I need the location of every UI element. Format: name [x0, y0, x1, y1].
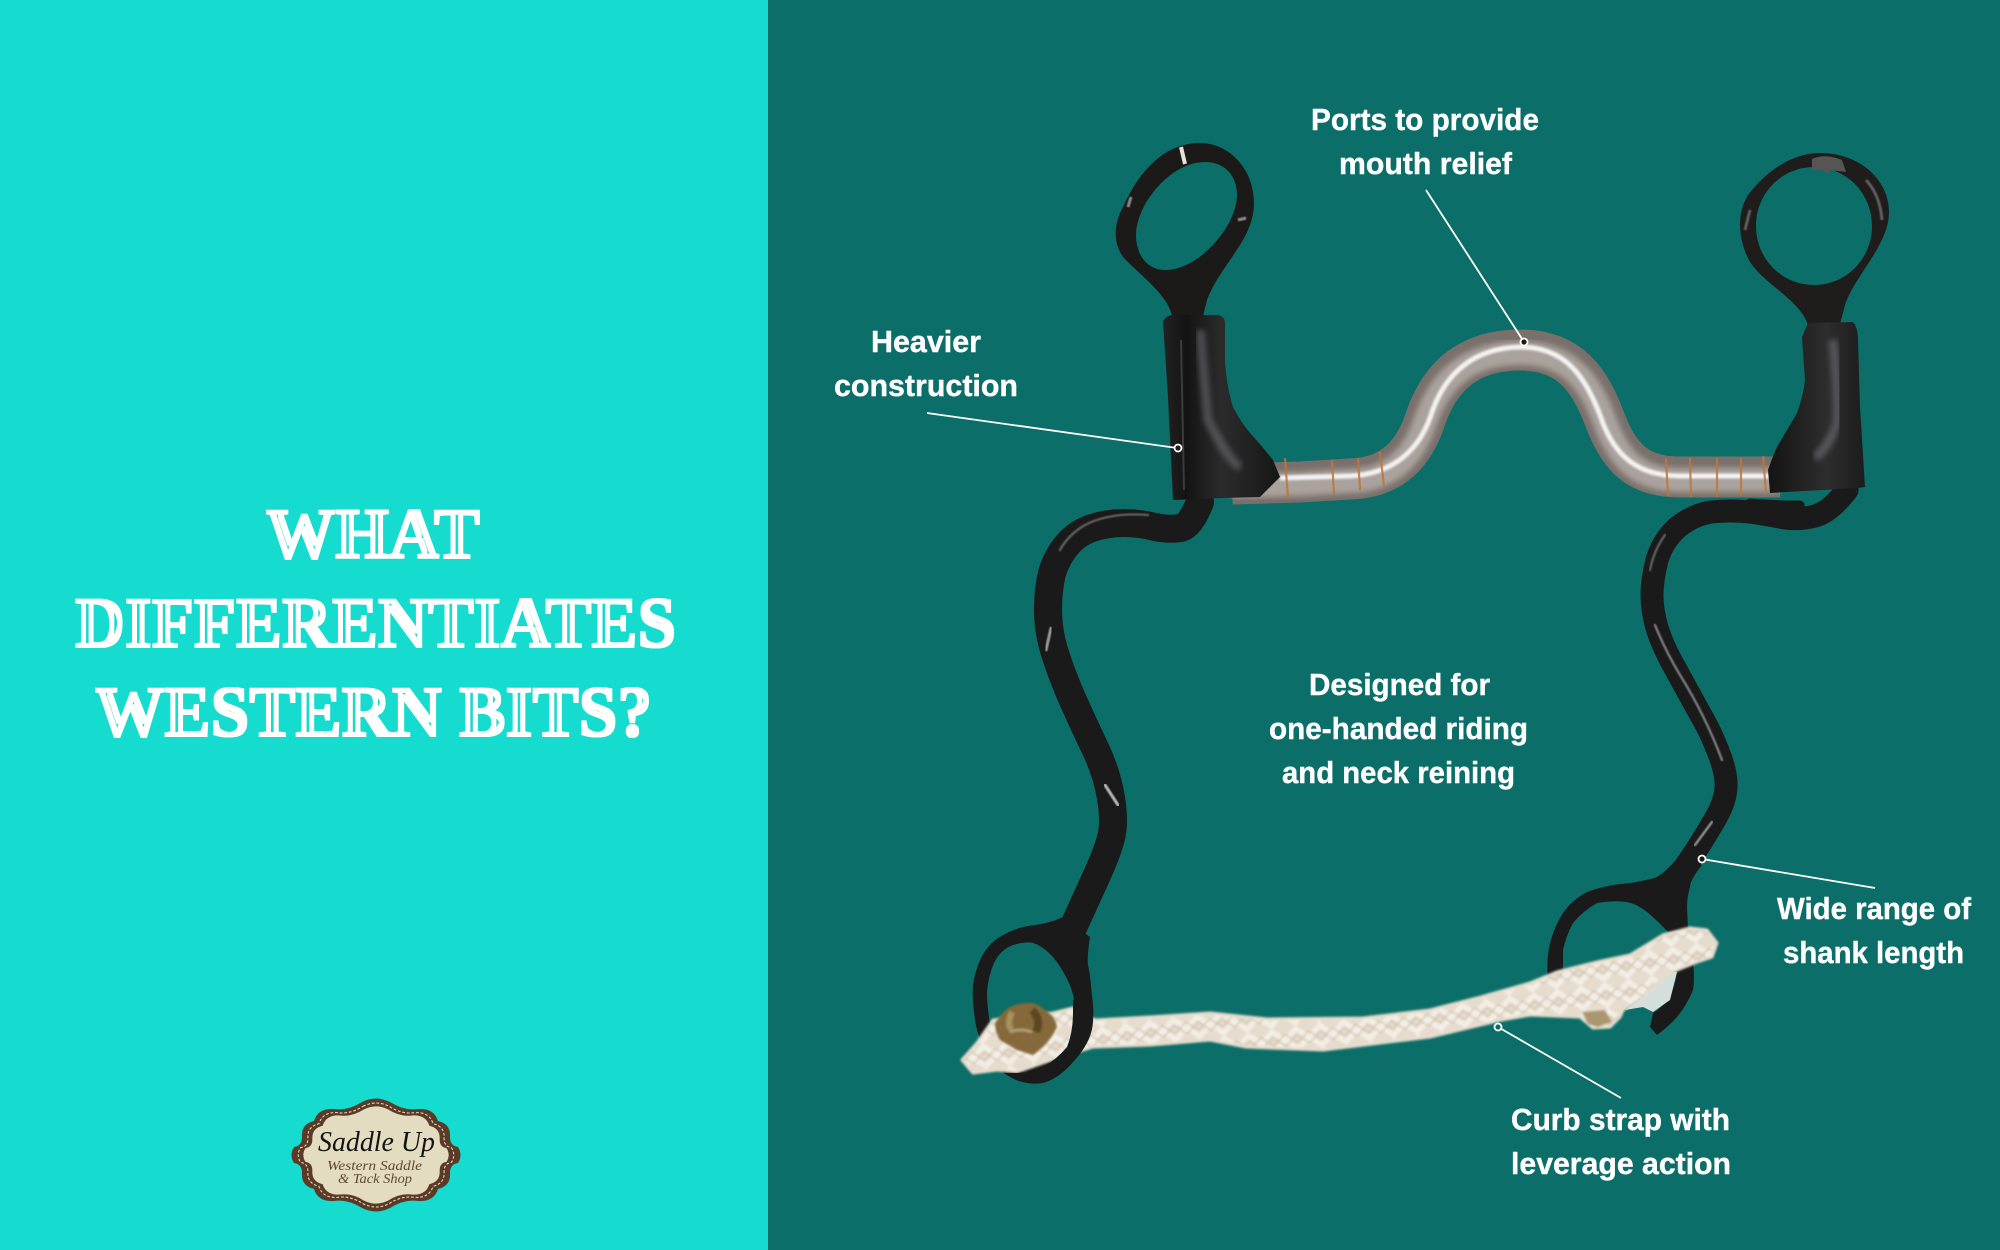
- title: [75, 494, 676, 752]
- left top ring: [1116, 143, 1254, 316]
- callout: heavier construction: Heavier: [871, 324, 981, 359]
- left lower ring: [973, 917, 1093, 1084]
- callout: shank length: [1698, 856, 1972, 970]
- rope curb strap: [962, 928, 1717, 1073]
- left cheek piece: [1163, 315, 1280, 500]
- callout: curb strap: leverage action: [1511, 1146, 1731, 1181]
- title: WESTERN BITS?: [95, 672, 652, 752]
- logo: Saddle Up badge: Saddle Up: [318, 1127, 435, 1158]
- lower knot tan: [1582, 1010, 1612, 1027]
- callout: designed for one-handed riding: and neck reining: [1282, 755, 1515, 790]
- brown knot: [995, 1003, 1057, 1055]
- callout: designed for one-handed riding: Designed for: [1309, 667, 1490, 702]
- logo: Saddle Up badge: Western Saddle: [327, 1159, 422, 1174]
- callout: designed for one-handed riding: one-handed riding: [1269, 711, 1528, 746]
- title: WHAT: [266, 494, 480, 574]
- callout: ports: mouth relief: [1339, 146, 1513, 181]
- callout: ports: [1311, 102, 1539, 346]
- right shank: [1650, 490, 1847, 870]
- mouthpiece with port: [1232, 347, 1780, 498]
- panel: right dark teal background: [768, 0, 2000, 1250]
- callout: heavier construction: [834, 324, 1182, 452]
- callout: curb strap: [1494, 1024, 1731, 1181]
- callout: curb strap: Curb strap with: [1511, 1102, 1730, 1137]
- callout: shank length: Wide range of: [1777, 891, 1972, 926]
- white patch in right ring: [1625, 972, 1677, 1012]
- title: DIFFERENTIATES: [75, 583, 676, 663]
- callout: designed for one-handed riding: [1269, 667, 1528, 790]
- callout: ports: Ports to provide: [1311, 102, 1539, 137]
- callout: heavier construction: construction: [834, 368, 1018, 403]
- logo: Saddle Up badge: [292, 1098, 460, 1212]
- left ring front arc: [1003, 996, 1093, 1084]
- panel: left turquoise background: [0, 0, 768, 1250]
- callout: shank length: shank length: [1783, 935, 1964, 970]
- logo: Saddle Up badge: & Tack Shop: [338, 1172, 412, 1187]
- right cheek piece: [1768, 322, 1865, 493]
- right top ring: [1740, 153, 1889, 325]
- right lower ring: [1547, 855, 1702, 1035]
- left shank: [1046, 502, 1200, 930]
- illustration: western curb bit: [962, 143, 1889, 1084]
